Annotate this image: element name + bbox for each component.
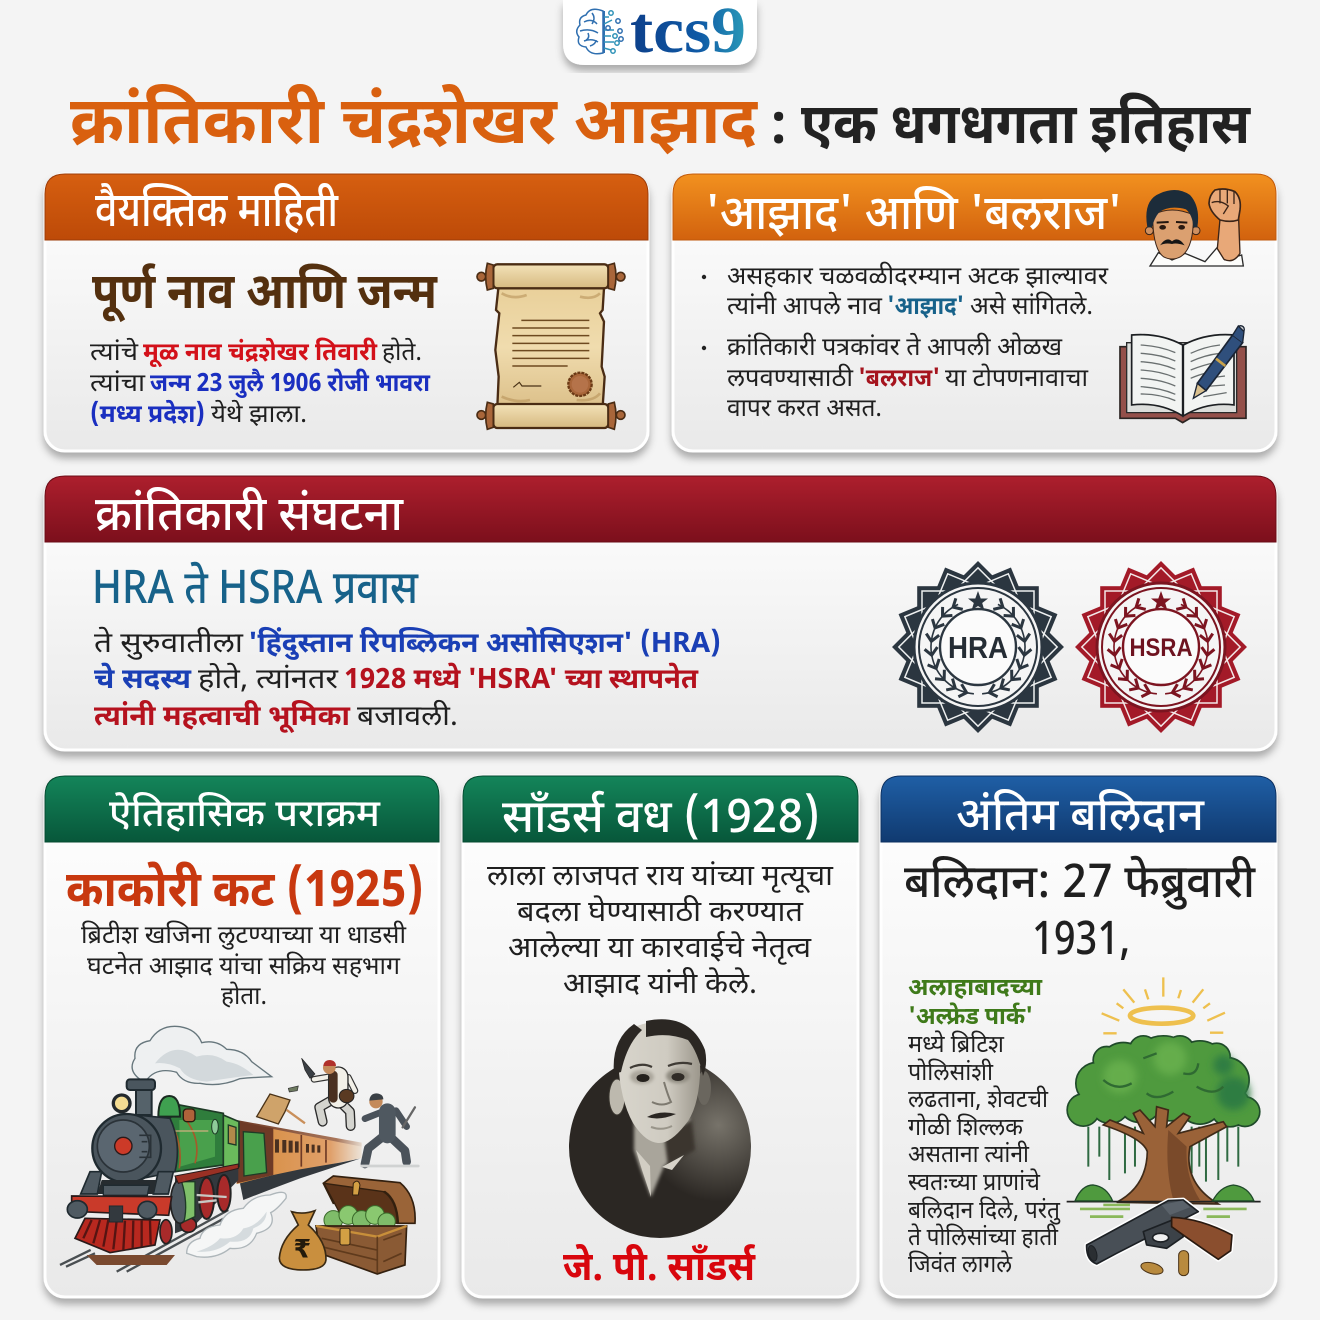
text block bbox=[487, 859, 833, 1005]
text block: birth details: येथे झाला. bbox=[211, 398, 307, 433]
text block bbox=[81, 920, 407, 1015]
man with pistol bbox=[302, 1058, 355, 1126]
train carriages and track bbox=[237, 1120, 362, 1200]
bullet list: क्रांतिकारी पत्रकांवर ते आपली ओळख bbox=[727, 331, 1063, 366]
panel: Saunders bbox=[463, 776, 858, 1297]
icon: man with raised fist bbox=[1145, 189, 1243, 266]
header text: वैयक्तिक माहिती bbox=[95, 182, 339, 246]
man running bbox=[362, 1093, 418, 1166]
subheading: date: बलिदान: 27 फेब्रुवारी bbox=[904, 855, 1257, 916]
panel: revolutionary organisation bbox=[45, 476, 1276, 750]
bullet list: असहकार चळवळीदरम्यान अटक झाल्यावर bbox=[727, 261, 1109, 295]
text block: organisation history: चे सदस्य bbox=[94, 661, 192, 700]
flying sack bbox=[257, 1094, 290, 1124]
steam cloud bbox=[132, 1026, 272, 1085]
header text: अंतिम बलिदान bbox=[956, 788, 1205, 849]
bullet list: 'आझाद' bbox=[887, 293, 964, 325]
hanging roots bbox=[1088, 1127, 1238, 1182]
money bag bbox=[279, 1211, 326, 1270]
text block: घटनेत आझाद यांचा सक्रिय सहभाग bbox=[87, 950, 401, 985]
subheading: date: 1931, bbox=[1032, 913, 1130, 973]
text block: birth details: मूळ नाव चंद्रशेखर तिवारी bbox=[143, 337, 378, 371]
portrait: J. P. Saunders bbox=[569, 1019, 751, 1238]
text block: होता. bbox=[221, 981, 267, 1015]
panel: Azad and Balraj bbox=[673, 174, 1276, 451]
bullet list: त्यांनी आपले नाव bbox=[727, 290, 883, 325]
text block: organisation history: 1928 मध्ये 'HSRA' च्या स्थापनेत bbox=[344, 661, 699, 700]
title: : एक धगधगता इतिहास bbox=[770, 93, 1252, 166]
text block: आलेल्या या कारवाईचे नेतृत्व bbox=[508, 931, 812, 969]
text block: Alfred Park: बलिदान दिले, परंतु bbox=[908, 1196, 1061, 1228]
title bbox=[70, 83, 1252, 170]
panel header bbox=[45, 174, 648, 240]
subheading: HRA ते HSRA प्रवास bbox=[92, 561, 419, 622]
badge: HSRA bbox=[1075, 561, 1247, 733]
header text: 'आझाद' आणि 'बलराज' bbox=[705, 186, 1122, 249]
text block: ब्रिटीश खजिना लुटण्याच्या या धाडसी bbox=[81, 920, 407, 954]
text block: Alfred Park bbox=[908, 973, 1061, 1282]
text block: Alfred Park: गोळी शिल्लक bbox=[908, 1113, 1024, 1145]
text block: Alfred Park: 'अल्फ्रेड पार्क' bbox=[908, 1002, 1033, 1034]
money bag: ₹ bbox=[293, 1233, 311, 1263]
trunk bbox=[1103, 1107, 1227, 1204]
ground bbox=[1067, 1199, 1261, 1204]
text block: birth details: त्यांचा bbox=[90, 370, 146, 402]
bullet list: असे सांगितले. bbox=[970, 290, 1093, 325]
text block: Alfred Park: असताना त्यांनी bbox=[908, 1140, 1030, 1172]
header text: साँडर्स वध (1928) bbox=[502, 790, 820, 851]
subheading: date bbox=[904, 855, 1257, 973]
text block: organisation history: होते, त्यांनतर bbox=[198, 662, 339, 700]
treasure chest bbox=[316, 1176, 415, 1274]
panel header bbox=[463, 776, 858, 842]
panel header bbox=[673, 174, 1276, 240]
header text: क्रांतिकारी संघटना bbox=[95, 487, 404, 550]
text block: Alfred Park: मध्ये ब्रिटिश bbox=[908, 1030, 1005, 1062]
text block: birth details bbox=[90, 336, 431, 433]
header text: ऐतिहासिक पराक्रम bbox=[109, 791, 381, 842]
text block: birth details: त्यांचे bbox=[90, 336, 139, 371]
locomotive bbox=[60, 1079, 239, 1272]
halo and rays bbox=[1102, 977, 1225, 1033]
logo: tcs9 bbox=[563, 0, 757, 67]
text block: Alfred Park: स्वतःच्या प्राणांचे bbox=[908, 1168, 1041, 1200]
panel: personal information bbox=[45, 174, 648, 451]
text block: लाला लाजपत राय यांच्या मृत्यूचा bbox=[487, 859, 833, 897]
text block: Alfred Park: अलाहाबादच्या bbox=[908, 973, 1043, 1005]
bullet list: या टोपणनावाचा bbox=[945, 363, 1089, 397]
bullet list: वापर करत असत. bbox=[727, 395, 882, 427]
text block: birth details: जन्म 23 जुलै 1906 रोजी भावरा bbox=[150, 368, 431, 402]
text block: organisation history: बजावली. bbox=[357, 699, 458, 737]
subheading: काकोरी कट (1925) bbox=[66, 861, 424, 927]
icon: circuit brain bbox=[577, 9, 623, 54]
illustration: train robbery bbox=[60, 1026, 418, 1274]
text block: Alfred Park: ते पोलिसांच्या हाती bbox=[908, 1223, 1059, 1255]
badge: HRA: HRA bbox=[948, 630, 1008, 665]
title: क्रांतिकारी चंद्रशेखर आझाद bbox=[70, 83, 758, 170]
subheading: पूर्ण नाव आणि जन्म bbox=[92, 263, 438, 329]
lower steam bbox=[187, 1192, 286, 1257]
caption: name: जे. पी. साँडर्स bbox=[563, 1244, 756, 1297]
text block: Alfred Park: पोलिसांशी bbox=[908, 1058, 994, 1090]
crown bbox=[1068, 1037, 1259, 1126]
text block: organisation history bbox=[94, 626, 721, 737]
illustration: banyan tree and pistol bbox=[1067, 977, 1261, 1276]
bullet list: 'बलराज' bbox=[858, 365, 940, 397]
panel header bbox=[881, 776, 1276, 842]
icon: parchment scroll bbox=[477, 263, 625, 429]
pistol bbox=[1087, 1200, 1232, 1264]
text block: birth details: होते. bbox=[382, 336, 422, 371]
bullet list bbox=[702, 261, 1109, 427]
text block: organisation history: ते सुरुवातीला bbox=[94, 626, 244, 664]
badge: HSRA: HSRA bbox=[1130, 634, 1192, 662]
panel: Kakori bbox=[45, 776, 439, 1297]
panel header bbox=[45, 776, 439, 842]
panel: final sacrifice bbox=[881, 776, 1276, 1297]
badge: HRA bbox=[892, 561, 1064, 733]
text block: organisation history: 'हिंदुस्तान रिपब्लिकन असोसिएशन' (HRA) bbox=[248, 626, 721, 664]
text block: Alfred Park: जिवंत लागले bbox=[908, 1250, 1013, 1282]
text block: birth details: (मध्य प्रदेश) bbox=[90, 399, 205, 433]
text block: organisation history: त्यांनी महत्वाची भूमिका bbox=[94, 699, 351, 737]
bullet list: लपवण्यासाठी bbox=[727, 363, 854, 397]
text block: बदला घेण्यासाठी करण्यात bbox=[517, 895, 803, 933]
panel header bbox=[45, 476, 1276, 542]
bullets bbox=[1179, 1251, 1189, 1276]
text block: Alfred Park: लढताना, शेवटची bbox=[908, 1085, 1049, 1117]
text block: आझाद यांनी केले. bbox=[563, 967, 757, 1005]
icon: open book and pen bbox=[1120, 326, 1246, 423]
